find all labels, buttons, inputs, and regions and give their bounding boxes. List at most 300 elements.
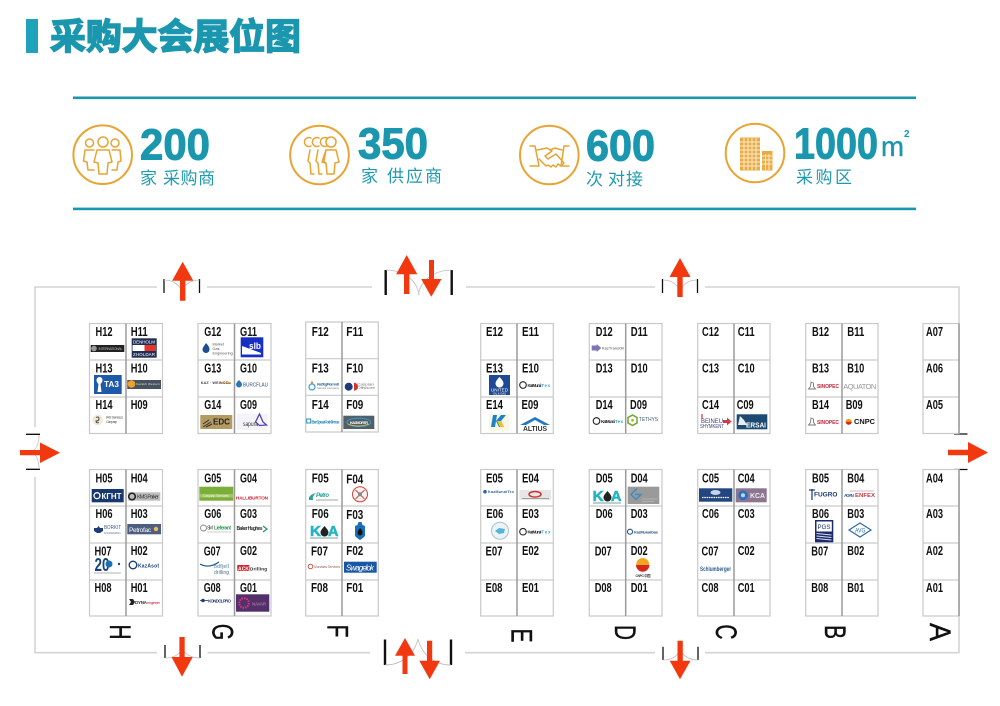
booth labels: G14 — [204, 398, 221, 412]
logo: H06 — [94, 525, 122, 535]
booth labels: C03 — [738, 507, 755, 521]
booth labels: D09 — [630, 398, 647, 412]
arrow: up — [395, 638, 415, 674]
stat: 1000 square metres: 2 — [904, 129, 910, 140]
booth labels: F10 — [346, 362, 363, 376]
booth labels: A01 — [926, 581, 943, 595]
logo: F05: Petro — [316, 493, 329, 499]
stat: 200 buyers: 200 — [140, 120, 210, 170]
door: right — [948, 434, 988, 470]
booth labels: B01 — [847, 581, 864, 595]
stats band — [73, 96, 916, 210]
block G upper — [198, 324, 271, 434]
logo: E13: OIL & GAS — [493, 392, 506, 396]
booth labels: F08 — [311, 581, 328, 595]
door: top centre — [386, 255, 452, 297]
title: 采购大会展位图 — [50, 16, 301, 57]
logo: D12: KazTransOil — [602, 346, 624, 350]
logo: H03 — [127, 524, 161, 534]
booth labels — [702, 472, 755, 595]
logo: D05 — [593, 488, 622, 505]
booth labels: C13 — [702, 362, 719, 376]
door: left — [20, 434, 60, 469]
logo: G13: KAZ · WEINGEL — [201, 381, 231, 385]
booth labels: G03 — [240, 507, 257, 521]
logo: E10 — [520, 382, 551, 388]
logo: D03: KazMunaiGas — [634, 530, 659, 534]
logo: H01: engineer — [147, 600, 161, 605]
logo: F10: Caspian — [357, 382, 374, 386]
block D upper — [589, 324, 662, 434]
logo: G02 — [237, 565, 267, 572]
logo: G12: Market — [212, 342, 225, 346]
logo: D09: TETHYS — [639, 417, 658, 423]
booth labels: B04 — [847, 472, 864, 486]
logo: B13: SINOPEC — [817, 384, 839, 390]
logo: G12 — [202, 342, 233, 356]
logo: C07: Schlumberger — [700, 566, 731, 573]
logo: H07: 20 — [94, 555, 110, 575]
logo: H11: DENHOLM — [133, 340, 155, 344]
booth labels: E07 — [486, 544, 503, 558]
block E upper — [481, 324, 553, 434]
stat: 350 suppliers — [290, 120, 442, 186]
booth labels: H09 — [131, 398, 148, 412]
booth labels: D04 — [631, 472, 648, 486]
block G lower — [198, 470, 271, 616]
logo: E03: KazMunai — [528, 530, 542, 535]
logo: B06: PGS — [818, 524, 831, 531]
booth labels: E04 — [522, 472, 539, 486]
logo: F13: KazTegiPromneft — [317, 382, 340, 386]
booth labels: G09 — [240, 398, 257, 412]
logo: F06: A — [328, 523, 339, 540]
logo: G11: slb — [249, 341, 261, 351]
booth labels: H05 — [96, 472, 113, 486]
booth labels: D08 — [595, 581, 612, 595]
logo: G01: NAVAR — [252, 602, 266, 606]
booth labels: A07 — [926, 325, 943, 339]
booth labels: H07 — [94, 544, 112, 558]
booth labels: H14 — [96, 398, 113, 412]
booth labels: E10 — [522, 362, 539, 376]
booth labels: F01 — [346, 581, 363, 595]
logo: C14: BEINEU — [701, 419, 723, 425]
logo: B03 — [849, 523, 871, 537]
booth labels — [486, 472, 539, 595]
logo: G12: Engineering — [212, 352, 233, 356]
arrow: up — [396, 255, 417, 294]
booth labels: D10 — [631, 362, 648, 376]
logo: F06 — [310, 523, 339, 540]
booth labels: G13 — [204, 362, 221, 376]
logo: F06: K — [310, 523, 321, 540]
booth labels: C12 — [702, 325, 719, 339]
booth labels: E14 — [486, 398, 503, 412]
logo: F07: Munaitas Services — [314, 565, 340, 569]
door: top left — [164, 262, 200, 301]
logo: H11: ZHOLDAR — [133, 352, 156, 357]
stat: 200 buyers: 采购商 — [163, 169, 215, 188]
logo: F09: KAZMORTR — [350, 420, 368, 425]
booth labels: B12 — [812, 325, 829, 339]
logo: F02: Swagelok — [346, 564, 375, 572]
booth labels: H04 — [131, 472, 148, 486]
stat: 1000 square metres: m — [881, 131, 904, 162]
booth labels: C09 — [737, 398, 754, 412]
booth labels: H10 — [131, 362, 148, 376]
logo: B04 — [844, 491, 875, 499]
logo: H10: Kazakh Western — [136, 382, 160, 386]
booth labels: F14 — [312, 398, 329, 412]
booth labels: A04 — [926, 472, 943, 486]
logo: C14: SHYMKENT — [700, 424, 724, 430]
booth labels: C02 — [738, 544, 755, 558]
logo: B09: CNPC — [854, 419, 875, 426]
block H upper — [90, 324, 162, 434]
logo: G05: Caspian Services — [203, 494, 229, 498]
logo: H01: DYNA — [135, 600, 148, 605]
column letters: G — [206, 624, 238, 640]
logo: G07: drilling — [214, 570, 229, 576]
booth labels: D07 — [595, 544, 612, 558]
booth labels: B06 — [812, 507, 829, 521]
logo: G03: Baker Hughes — [236, 526, 263, 532]
booth labels: F06 — [312, 507, 329, 521]
booth labels: F03 — [346, 508, 363, 522]
logo: C14 — [700, 414, 732, 430]
logo: H11 — [132, 338, 157, 358]
logo: C04 — [736, 488, 767, 502]
logo: G06 — [200, 525, 231, 532]
stat: 200 buyers — [73, 120, 215, 188]
booth labels: B03 — [847, 507, 864, 521]
booth labels: B10 — [847, 362, 864, 376]
booth labels: G06 — [204, 507, 221, 521]
booth labels: C05 — [702, 472, 719, 486]
icon: buyers group — [73, 125, 132, 184]
logo: F13 — [309, 380, 340, 390]
booth labels: D01 — [631, 581, 648, 595]
booth labels: B05 — [812, 472, 829, 486]
logo: E10: KazMunai — [528, 383, 542, 388]
logo: E05: KazMunaiTex — [488, 490, 515, 494]
booth labels: H13 — [96, 362, 113, 376]
logo: G10: BURCFLAU — [243, 382, 268, 388]
logo: G07 — [200, 562, 229, 576]
block F upper — [306, 322, 378, 432]
stat: 1000 square metres: 1000 — [794, 120, 878, 168]
booth labels: B09 — [846, 398, 863, 412]
logo: G09: sapura — [243, 422, 259, 428]
logo: G06: Lieferant — [214, 526, 231, 532]
block A — [923, 324, 959, 616]
booth labels — [204, 325, 257, 412]
booth labels: C10 — [738, 362, 755, 376]
stat: 200 buyers: 家 — [140, 169, 157, 188]
booth labels: E12 — [486, 325, 503, 339]
door: bottom left — [165, 637, 200, 677]
booth labels: B13 — [812, 362, 829, 376]
logo: F10: Offshore — [357, 386, 375, 390]
logo: B03: AVG — [855, 528, 866, 534]
booth labels: F02 — [346, 544, 363, 558]
booth labels: H08 — [94, 581, 112, 595]
stat: 350 suppliers: 350 — [358, 120, 428, 168]
logo: G12: Gas — [212, 347, 220, 351]
column letters — [103, 623, 956, 643]
booth labels: A05 — [926, 398, 943, 412]
logo: F13: Service Company — [317, 386, 340, 390]
logo: B04: ENFEX — [855, 493, 875, 499]
booth labels — [596, 325, 648, 412]
block B lower — [806, 470, 878, 616]
column letters: B — [818, 625, 851, 639]
logo: F10 — [345, 382, 375, 391]
logo: H03: Petrofac — [129, 527, 152, 534]
logo: G05 — [199, 487, 233, 501]
logo: H01 — [129, 599, 161, 605]
booth labels: E08 — [486, 581, 503, 595]
booth labels: D02 — [631, 544, 648, 558]
logo: F14: BerSpearFor.Kitmas — [312, 420, 340, 424]
logo: B05: FUGRO — [814, 492, 838, 498]
arrow: down — [421, 260, 442, 297]
block B upper — [806, 324, 878, 434]
logo: F05 — [309, 493, 338, 500]
logo: D02 — [636, 558, 651, 578]
booth labels: D11 — [631, 325, 648, 339]
booth labels: C11 — [738, 325, 755, 339]
block F lower — [306, 470, 378, 616]
booth labels: B14 — [812, 398, 829, 412]
booth labels: E01 — [522, 581, 539, 595]
booth labels: G12 — [204, 325, 221, 339]
booth labels: G01 — [240, 581, 257, 595]
booth labels: G11 — [240, 325, 257, 339]
logo: H04: KMG Parker — [137, 494, 159, 500]
logo: C04: KCA — [750, 493, 765, 500]
logo: D02: CNPC 中国 — [636, 573, 651, 578]
booth labels — [486, 325, 539, 412]
logo: D14: KazMunai — [601, 419, 615, 424]
logo: G06: SM — [207, 526, 213, 532]
logo: E10: Tex — [542, 383, 551, 388]
logo: G02: ACK — [238, 566, 249, 572]
block C upper — [698, 324, 770, 434]
logo: H05 — [92, 489, 124, 502]
logo: B05 — [809, 489, 838, 500]
booth labels: A06 — [926, 362, 943, 376]
booth labels: B11 — [847, 325, 864, 339]
booth labels: D12 — [596, 325, 613, 339]
booth labels: H12 — [96, 325, 113, 339]
booth labels: C07 — [702, 544, 719, 558]
booth labels: F09 — [346, 398, 363, 412]
logo: C05 — [699, 488, 732, 502]
block H lower — [90, 470, 162, 616]
booth labels — [204, 472, 257, 595]
logo: H13: TA3 — [104, 380, 120, 389]
booth labels — [96, 325, 148, 412]
logo: E13: UNITED — [491, 388, 509, 392]
booth labels: C01 — [738, 581, 755, 595]
logo: D05: A — [611, 488, 622, 505]
booth labels: F13 — [312, 362, 329, 376]
booth labels: E06 — [486, 507, 503, 521]
stat: 1000 square metres — [726, 120, 910, 187]
booth labels: G10 — [240, 362, 257, 376]
logo: H06: BORKIT — [104, 525, 121, 531]
logo: B06 — [815, 520, 833, 542]
stat: 1000 square metres: 采购区 — [796, 168, 852, 187]
column letters: F — [321, 625, 353, 637]
logo: G14: EDC — [213, 418, 230, 426]
booth labels: C06 — [702, 507, 719, 521]
logo: D04 — [628, 487, 659, 504]
block E lower — [481, 470, 553, 616]
booth labels: B08 — [811, 581, 828, 595]
logo: E06 — [492, 522, 508, 539]
booth labels: D03 — [631, 507, 648, 521]
booth labels — [702, 325, 755, 412]
stat: 350 suppliers: 供应商 — [387, 167, 442, 186]
logo: H12: INTERNATIONAL — [98, 347, 123, 351]
stat: 600 meetings: 600 — [586, 122, 655, 170]
booth labels: C04 — [738, 472, 755, 486]
logo: D14 — [593, 418, 624, 424]
door: bottom right — [663, 641, 698, 679]
logo: G01 — [236, 594, 269, 612]
arrow: entrance up — [670, 258, 690, 297]
booth labels: G04 — [240, 472, 257, 486]
logo: F04 — [352, 487, 368, 502]
logo: H02 — [129, 561, 159, 570]
booth labels: D05 — [596, 472, 613, 486]
logo: E13 — [489, 375, 510, 396]
booth labels: B02 — [847, 544, 864, 558]
logo: B04: AGAN — [844, 493, 855, 499]
booth labels: C14 — [702, 398, 719, 412]
logo: E04 — [519, 490, 551, 500]
booth labels: H06 — [96, 507, 113, 521]
booth labels: F11 — [346, 325, 363, 339]
column letters: C — [709, 624, 742, 640]
stat: 350 suppliers: 家 — [361, 167, 378, 186]
booth labels: H02 — [131, 544, 148, 558]
booth labels: F04 — [346, 472, 363, 486]
booth labels — [312, 325, 363, 412]
booth labels: G05 — [204, 472, 221, 486]
arrow: exit down — [172, 637, 193, 677]
logo: H05: КГНТ — [102, 492, 122, 501]
booth labels — [595, 472, 648, 595]
logo: C09: ERSAI — [746, 422, 766, 430]
booth labels: H03 — [131, 507, 148, 521]
icon: suppliers group — [290, 126, 349, 184]
booth labels: B07 — [811, 544, 828, 558]
stat: 600 meetings: 次 — [586, 170, 603, 189]
booth labels: E03 — [522, 507, 539, 521]
logo: F07 — [308, 564, 340, 569]
stat: 600 meetings — [520, 122, 655, 189]
logo: G02: Drilling — [250, 566, 267, 572]
logo: H04 — [128, 492, 160, 501]
logo: B10: AQUATON — [843, 382, 876, 391]
logo: H06: ENGINEERING — [104, 531, 122, 535]
logo: H14: IAS Services — [106, 416, 123, 420]
booth labels: A03 — [926, 507, 943, 521]
booth labels: E05 — [486, 472, 503, 486]
arrow: down — [419, 641, 440, 679]
booth labels: E02 — [522, 544, 539, 558]
booth labels: E09 — [522, 398, 539, 412]
logo: D05: K — [593, 488, 604, 505]
booth labels: D06 — [596, 507, 613, 521]
logo: B14: SINOPEC — [817, 420, 839, 426]
logo: H02: KazAsot — [138, 564, 159, 570]
icon: buildings — [726, 124, 784, 182]
icon: handshake — [520, 126, 579, 184]
arrow: exit down — [670, 641, 690, 679]
logo: F03 — [355, 522, 365, 540]
logo: D14: Tex — [615, 419, 624, 424]
logo: H14 — [92, 415, 123, 425]
booth labels: A02 — [926, 544, 943, 558]
booth labels: D14 — [596, 398, 613, 412]
booth labels: F07 — [311, 544, 328, 558]
logo: G07: odfjell — [214, 564, 229, 570]
arrow: entrance up — [172, 262, 193, 301]
block C lower — [698, 470, 770, 616]
stat: 600 meetings: 对接 — [608, 170, 643, 189]
arrow: entrance right — [20, 442, 60, 463]
booth labels: H01 — [131, 581, 148, 595]
block D lower — [589, 470, 662, 616]
logo: E09: ALTIUS — [523, 426, 547, 433]
door: top right — [662, 258, 698, 297]
column letters: H — [103, 624, 135, 640]
booth labels — [811, 472, 864, 595]
booth labels — [812, 325, 864, 412]
booth labels — [926, 325, 943, 595]
arrow: exit right — [948, 442, 988, 463]
booth labels: G07 — [204, 544, 221, 558]
column letters: D — [608, 625, 641, 640]
booth labels: G02 — [240, 544, 257, 558]
logo: E03: Tex — [542, 530, 551, 535]
booth labels — [94, 472, 148, 595]
booth labels — [311, 472, 363, 595]
logo: G08: KONDOLPRO — [208, 598, 232, 604]
logo: G04: HALLIBURTON — [236, 496, 269, 500]
booth labels: E13 — [486, 362, 503, 376]
booth labels: G08 — [204, 581, 221, 595]
door: bottom centre — [385, 638, 451, 679]
booth labels: H11 — [131, 325, 148, 339]
logo: E03 — [520, 528, 551, 535]
column letters: A — [923, 623, 956, 641]
booth labels: F05 — [312, 472, 329, 486]
booth labels: D13 — [596, 362, 613, 376]
logo: E14 — [489, 414, 509, 431]
venue wall outline — [35, 287, 959, 653]
booth labels: E11 — [522, 325, 539, 339]
column letters: E — [505, 628, 537, 643]
logo: H14: Company — [106, 420, 117, 424]
booth labels: F12 — [312, 325, 329, 339]
booth labels: C08 — [702, 581, 719, 595]
